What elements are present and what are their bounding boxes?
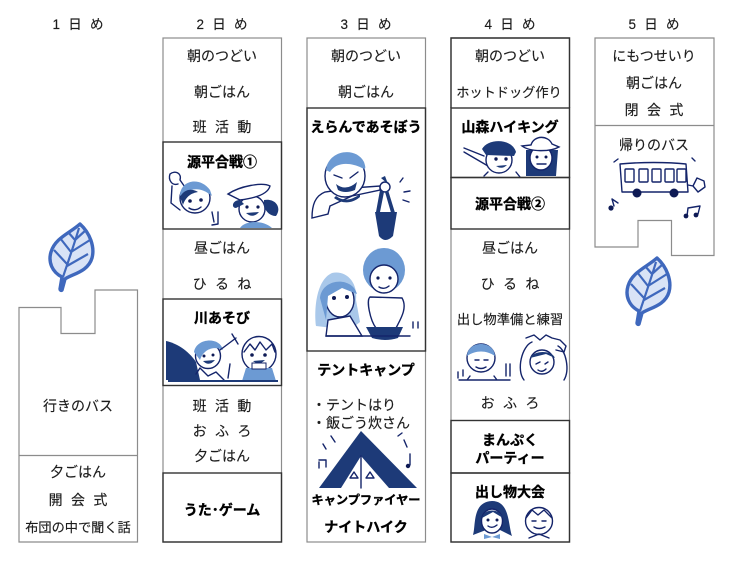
text: nap: ひ る ね bbox=[481, 276, 539, 292]
outline: day 3 box bbox=[307, 38, 426, 542]
illustration: hiking kids bbox=[464, 137, 559, 177]
block: mountain hiking bbox=[451, 108, 570, 178]
label: genpei battle 2: 源平合戦② bbox=[475, 196, 545, 212]
label: songs and games: うた･ゲーム bbox=[184, 502, 260, 518]
icon: leaf right bbox=[627, 258, 670, 324]
icon: leaf left bbox=[50, 224, 93, 290]
label: campfire: キャンプファイヤー bbox=[312, 493, 420, 507]
label: party: パーティー bbox=[475, 450, 545, 466]
text: tent setup list bbox=[312, 397, 410, 431]
text: outbound bus: 行きのバス bbox=[43, 398, 113, 414]
text: bath: お ふ ろ bbox=[193, 423, 251, 439]
illustration: two kids cheering bbox=[169, 172, 278, 228]
text: pitch tents: ・テントはり bbox=[312, 397, 396, 413]
heading: day 5: 5 日 め bbox=[628, 17, 680, 32]
text: closing ceremony: 閉 会 式 bbox=[625, 102, 683, 118]
text: group activity: 班 活 動 bbox=[193, 119, 251, 135]
text: breakfast: 朝ごはん bbox=[338, 84, 394, 100]
illustration: bus bbox=[608, 158, 705, 218]
text: lunch: 昼ごはん bbox=[194, 240, 250, 256]
panel: day 3 bbox=[307, 17, 426, 542]
illustration: boy with basket bbox=[312, 152, 410, 240]
block: river play bbox=[163, 299, 282, 386]
text: lunch: 昼ごはん bbox=[482, 240, 538, 256]
heading: day 4: 4 日 め bbox=[484, 17, 536, 32]
text: breakfast: 朝ごはん bbox=[194, 84, 250, 100]
text: nap: ひ る ね bbox=[193, 276, 251, 292]
text: pack luggage: にもつせいり bbox=[612, 48, 696, 64]
panel: day 4 bbox=[451, 17, 570, 542]
illustration: tent bbox=[319, 431, 417, 488]
text: opening ceremony: 開 会 式 bbox=[49, 492, 107, 508]
block: choose and play bbox=[307, 108, 426, 351]
label: choose and play: えらんであそぼう bbox=[310, 119, 422, 135]
text: bath: お ふ ろ bbox=[481, 395, 539, 411]
outline: day 5 box bbox=[595, 38, 714, 256]
text: breakfast: 朝ごはん bbox=[626, 75, 682, 91]
outline: day 4 box bbox=[451, 38, 570, 542]
block: full-belly party bbox=[451, 420, 570, 473]
text: group activity afternoon: 班 活 動 bbox=[193, 398, 251, 414]
heading: day 2: 2 日 め bbox=[196, 17, 248, 32]
text: story in futon: 布団の中で聞く話 bbox=[25, 520, 131, 535]
text: morning gathering: 朝のつどい bbox=[475, 48, 545, 64]
label: night hike: ナイトハイク bbox=[324, 519, 408, 535]
block: genpei battle 1 bbox=[163, 142, 282, 229]
heading: day 1: 1 日 め bbox=[52, 17, 104, 32]
text: morning gathering: 朝のつどい bbox=[187, 48, 257, 64]
heading: day 3: 3 日 め bbox=[340, 17, 392, 32]
label: river play: 川あそび bbox=[194, 310, 250, 326]
panel: day 2 bbox=[163, 17, 282, 542]
text: dinner: 夕ごはん bbox=[50, 464, 106, 480]
block: genpei battle 2 bbox=[451, 178, 570, 229]
label: mountain hiking: 山森ハイキング bbox=[461, 119, 559, 135]
label: tent camp: テントキャンプ bbox=[317, 362, 415, 378]
label: full belly: まんぷく bbox=[482, 432, 538, 448]
label: talent show: 出し物大会 bbox=[475, 484, 545, 500]
text: rice cooking: ・飯ごう炊さん bbox=[312, 415, 410, 431]
illustration: kids in bath bbox=[458, 335, 567, 380]
illustration: two kids with bow ties bbox=[473, 501, 552, 539]
block: songs and games bbox=[163, 473, 282, 542]
label: genpei battle 1: 源平合戦① bbox=[187, 154, 257, 170]
outline: day 2 box bbox=[163, 38, 282, 542]
outline: day 1 box bbox=[19, 290, 138, 542]
panel: day 5 bbox=[595, 17, 714, 324]
illustration: two kids cooking bbox=[315, 248, 418, 340]
text: return bus: 帰りのバス bbox=[619, 137, 689, 153]
text: dinner: 夕ごはん bbox=[194, 448, 250, 464]
text: morning gathering: 朝のつどい bbox=[331, 48, 401, 64]
panel: day 1 bbox=[19, 17, 138, 542]
text: hot dog making: ホットドッグ作り bbox=[456, 85, 562, 100]
block: talent show bbox=[451, 473, 570, 542]
text: show preparation: 出し物準備と練習 bbox=[457, 312, 563, 327]
illustration: kids in river bbox=[166, 334, 278, 382]
